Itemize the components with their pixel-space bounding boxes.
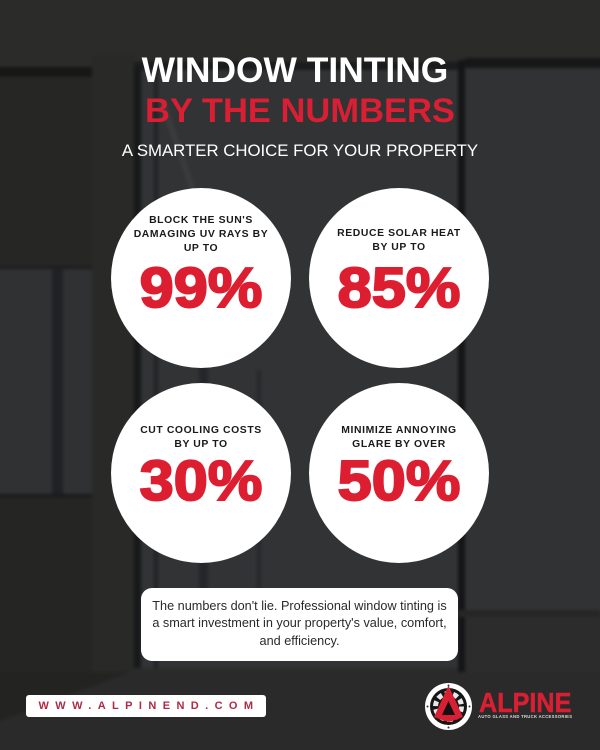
stat number: 50% [338,449,460,513]
stat circle: 30% [111,383,291,563]
stat label: BY UP TO [174,439,228,450]
stat label: UP TO [184,243,218,254]
stat label: BLOCK THE SUN'S [149,215,253,226]
stat number: 30% [140,449,262,513]
stat circle: 85% [309,188,489,368]
callout panel: a smart investment in your property's value, comfort, [152,616,447,630]
stat number: 85% [338,256,460,320]
stat number: 99% [140,256,262,320]
stat label: GLARE BY OVER [352,439,446,450]
stat circle: 50% [309,383,489,563]
stat label [341,425,457,450]
stat label [140,425,262,450]
website badge: WWW.ALPINEND.COM [39,700,259,712]
logo tagline: AUTO GLASS AND TRUCK ACCESSORIES [478,714,572,719]
stat label: BY UP TO [372,242,426,253]
logo emblem [425,683,472,730]
title: window tinting: WINDOW TINTING [142,50,448,90]
website badge [26,695,266,717]
stat label: REDUCE SOLAR HEAT [337,228,461,239]
stat label [134,215,268,254]
callout panel: The numbers don't lie. Professional window tinting is [152,599,447,613]
subtitle: A SMARTER CHOICE FOR YOUR PROPERTY [122,141,478,160]
callout panel [141,588,458,661]
callout panel: and efficiency. [260,634,339,648]
stat label: DAMAGING UV RAYS BY [134,229,268,240]
title: by the numbers: BY THE NUMBERS [145,92,455,130]
stat label [337,228,461,253]
stat circle: 99% [111,188,291,368]
logo: alpine [425,683,572,730]
logo wordmark: ALPINE [479,687,571,718]
stat label: MINIMIZE ANNOYING [341,425,457,436]
stat label: CUT COOLING COSTS [140,425,262,436]
